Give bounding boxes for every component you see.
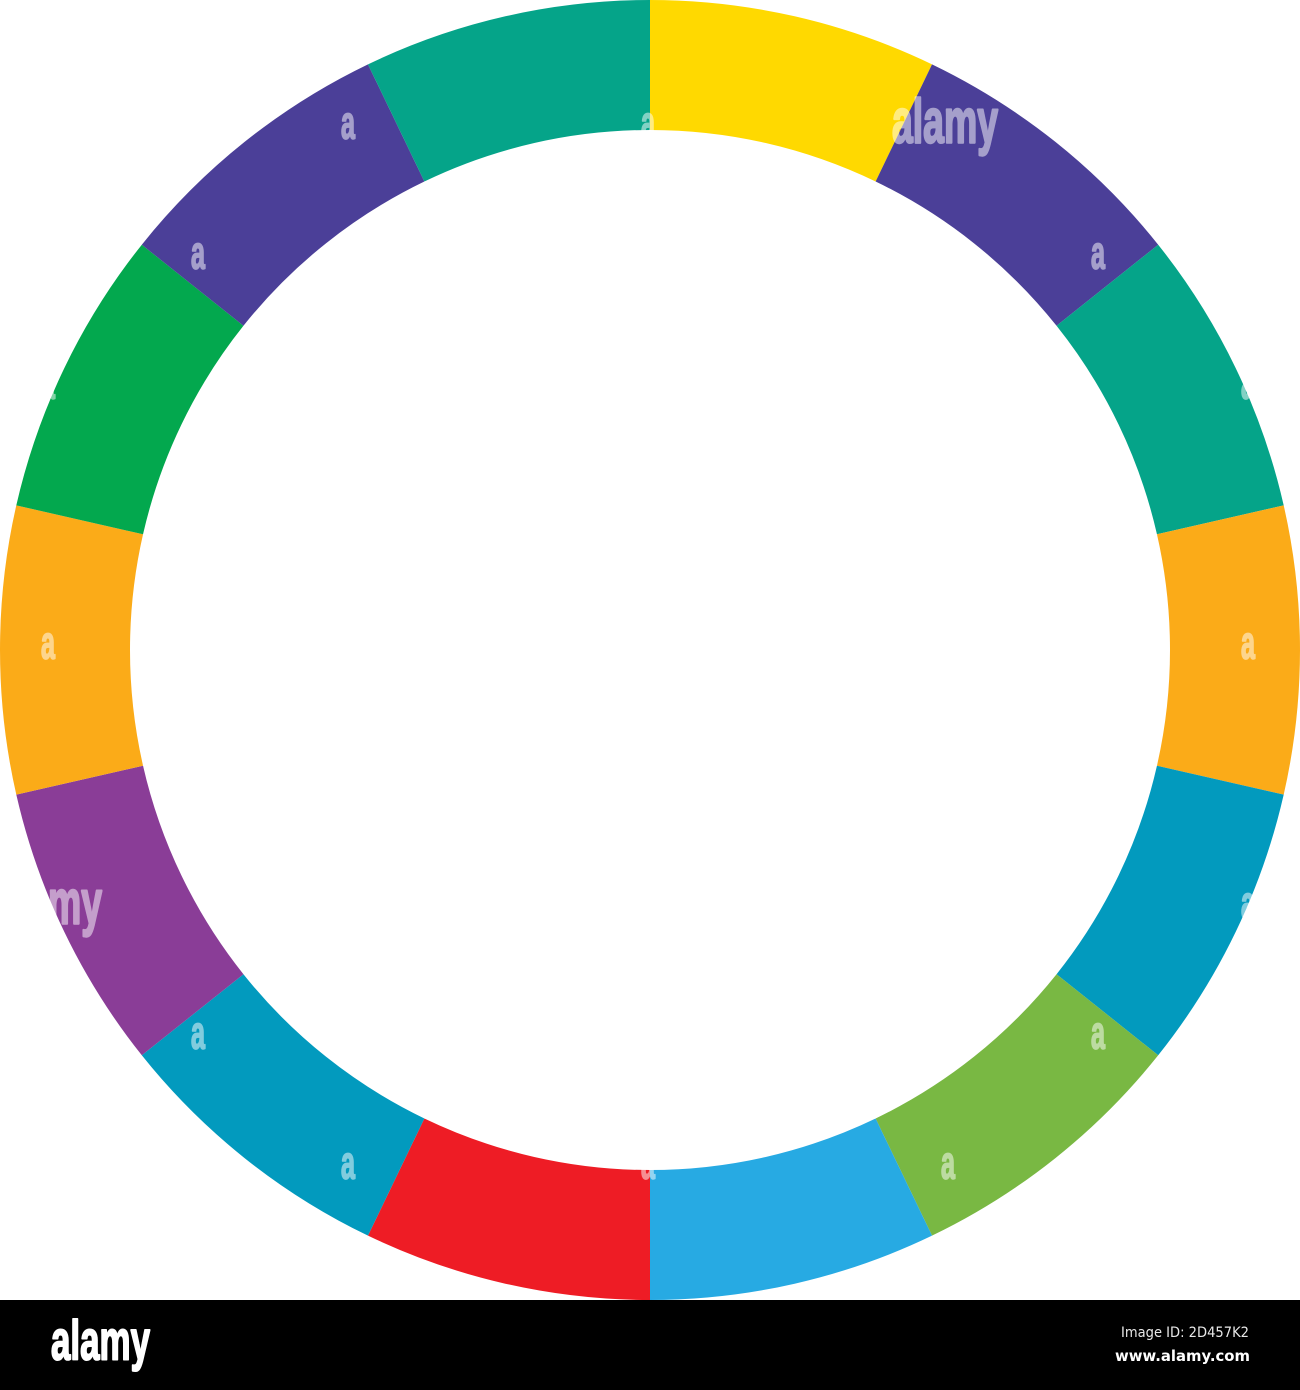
- segment 13: indigo: [142, 64, 424, 326]
- watermark overlay: [0, 88, 1255, 1188]
- footer logo: alamy: [51, 1308, 150, 1372]
- watermark overlay: a: [641, 1136, 655, 1188]
- segment 4: orange: [1157, 505, 1300, 795]
- watermark overlay: a: [1091, 1006, 1105, 1058]
- segment 6: lime green: [876, 974, 1158, 1236]
- watermark overlay: alamy: [892, 88, 998, 156]
- watermark overlay: a: [191, 1006, 205, 1058]
- watermark overlay: alamy: [0, 868, 102, 938]
- segment 5: blue: [1057, 766, 1284, 1055]
- segment 9: blue: [142, 974, 424, 1236]
- watermark overlay: a: [341, 96, 355, 148]
- segment 8: red: [368, 1118, 650, 1300]
- watermark overlay: a: [191, 226, 205, 278]
- segment 2: indigo: [876, 64, 1158, 326]
- image id: Image ID: 2D457K2: [1121, 1325, 1249, 1341]
- segment 12: green: [16, 245, 243, 534]
- watermark overlay: a: [341, 1136, 355, 1188]
- segment 14: teal: [368, 0, 650, 182]
- watermark overlay: a: [1241, 356, 1255, 408]
- watermark overlay: a: [641, 96, 655, 148]
- segment 11: orange: [0, 505, 143, 795]
- watermark overlay: a: [41, 356, 55, 408]
- segment 1: yellow: [650, 0, 932, 182]
- watermark overlay: a: [41, 616, 55, 668]
- watermark overlay: a: [941, 1136, 955, 1188]
- watermark overlay: a: [1241, 876, 1255, 928]
- watermark overlay: a: [1241, 616, 1255, 668]
- footer bar: [0, 1300, 1300, 1390]
- segment 7: light blue: [650, 1118, 932, 1300]
- segment 3: teal: [1057, 245, 1284, 534]
- watermark overlay: a: [1091, 226, 1105, 278]
- segment 10: purple: [16, 766, 243, 1055]
- website: www.alamy.com: [1115, 1347, 1250, 1365]
